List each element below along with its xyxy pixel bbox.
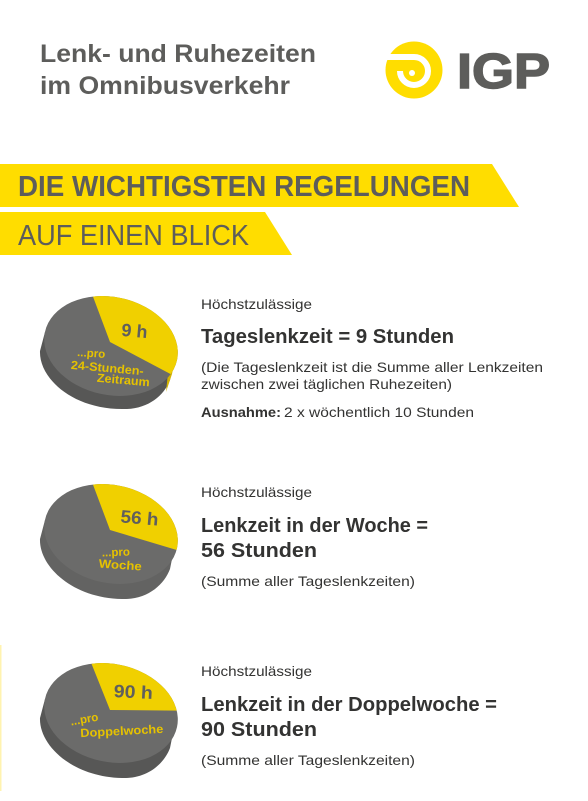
logo: IGP: IGP xyxy=(457,45,550,99)
pie chart: 56 h: 56 h xyxy=(120,506,159,530)
pie chart: 90 h: Doppelwoche xyxy=(80,722,164,740)
pie chart: 9 h xyxy=(40,296,178,409)
pie chart: 9 h: 9 h xyxy=(121,320,148,342)
banner: Die wichtigsten Regelungen: DIE WICHTIGSTEN REGELUNGEN xyxy=(18,171,470,203)
text block: Tageslenkzeit: zwischen zwei täglichen Ruhezeiten) xyxy=(201,376,452,392)
text block: Lenkzeit in der Woche xyxy=(201,484,428,589)
text block: Tageslenkzeit: Tageslenkzeit = 9 Stunden xyxy=(201,326,454,348)
text block: Lenkzeit in der Doppelwoche: (Summe aller Tageslenkzeiten) xyxy=(201,752,415,768)
logo: IGP xyxy=(385,42,550,99)
pie chart: 56 h xyxy=(40,484,178,599)
text block: Lenkzeit in der Woche: Lenkzeit in der Woche = xyxy=(201,515,428,537)
text block: Lenkzeit in der Doppelwoche: Höchstzulässige xyxy=(201,663,312,679)
text block: Lenkzeit in der Woche: (Summe aller Tageslenkzeiten) xyxy=(201,573,415,589)
text block: Lenkzeit in der Doppelwoche: 90 Stunden xyxy=(201,719,317,741)
pie chart: 90 h xyxy=(40,663,178,778)
text block: Lenkzeit in der Woche: Höchstzulässige xyxy=(201,484,312,500)
title: im Omnibusverkehr xyxy=(40,72,290,100)
pie chart: 9 h: 24-Stunden- xyxy=(70,358,144,378)
text block: Lenkzeit in der Doppelwoche: Lenkzeit in der Doppelwoche = xyxy=(201,694,497,716)
title: Lenk- und Ruhezeiten xyxy=(40,40,316,68)
text block: Tageslenkzeit: Höchstzulässige xyxy=(201,296,312,312)
text block: Lenkzeit in der Woche: 56 Stunden xyxy=(201,540,317,562)
text block: Tageslenkzeit: 2 x wöchentlich 10 Stunden xyxy=(284,404,474,420)
pie chart: 90 h: ...pro xyxy=(70,712,99,728)
text block: Tageslenkzeit: (Die Tageslenkzeit ist die Summe aller Lenkzeiten xyxy=(201,359,543,375)
text block: Lenkzeit in der Doppelwoche xyxy=(201,663,497,768)
banner: Auf einen Blick: AUF EINEN BLICK xyxy=(18,220,250,252)
text block: Tageslenkzeit xyxy=(201,296,543,420)
pie chart: 56 h: ...pro xyxy=(102,547,130,559)
title xyxy=(40,40,316,100)
text block: Tageslenkzeit: Ausnahme: xyxy=(201,404,281,420)
banner: Die wichtigsten Regelungen xyxy=(0,164,519,207)
pie chart: 9 h: ...pro xyxy=(77,347,106,361)
pie chart: 56 h: Woche xyxy=(98,557,143,574)
pie chart: 90 h: 90 h xyxy=(113,681,153,703)
pie chart: 9 h: Zeitraum xyxy=(96,371,150,389)
banner: Auf einen Blick xyxy=(0,212,292,255)
